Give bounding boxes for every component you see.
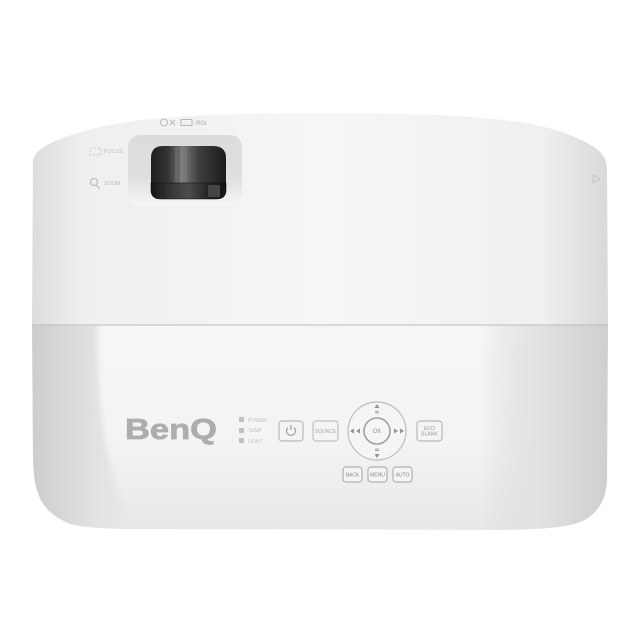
right side shading [498, 326, 608, 530]
directional pad [348, 402, 406, 460]
OK button [364, 418, 390, 444]
left side shading [32, 326, 113, 528]
lens tab [208, 185, 220, 197]
status indicators: TEMP [248, 428, 263, 434]
lens recess [128, 135, 242, 205]
projector top view illustration [32, 113, 608, 530]
eco blank button: BLANK [421, 432, 438, 438]
source button: SOURCE [315, 429, 337, 435]
zoom label [90, 178, 121, 189]
throw ratio label: RGI [196, 121, 207, 127]
eco blank button: ECO [424, 426, 435, 432]
back button: BACK [346, 472, 360, 478]
side icon [593, 175, 600, 183]
projector body [20, 110, 620, 545]
focus label: FOCUS [104, 149, 124, 155]
menu button: MENU [370, 472, 385, 478]
seam line [32, 324, 608, 326]
throw ratio label [160, 119, 207, 127]
BenQ logo: BenQ [125, 414, 217, 446]
zoom label: ZOOM [104, 181, 121, 187]
back button [343, 467, 362, 482]
lens stripes [176, 147, 186, 182]
menu button [368, 467, 387, 482]
status indicators: LIGHT [248, 439, 263, 445]
lower housing [100, 326, 518, 530]
source button [313, 421, 338, 441]
lens barrel [151, 146, 226, 199]
auto button [393, 467, 412, 482]
status indicators [239, 417, 267, 445]
status indicators: POWER [248, 418, 267, 424]
eco blank button [417, 421, 442, 441]
lens focus ring [151, 183, 226, 199]
power button [279, 421, 303, 441]
directional pad: OK [373, 429, 381, 435]
focus label [90, 148, 124, 155]
auto button: AUTO [396, 472, 410, 478]
